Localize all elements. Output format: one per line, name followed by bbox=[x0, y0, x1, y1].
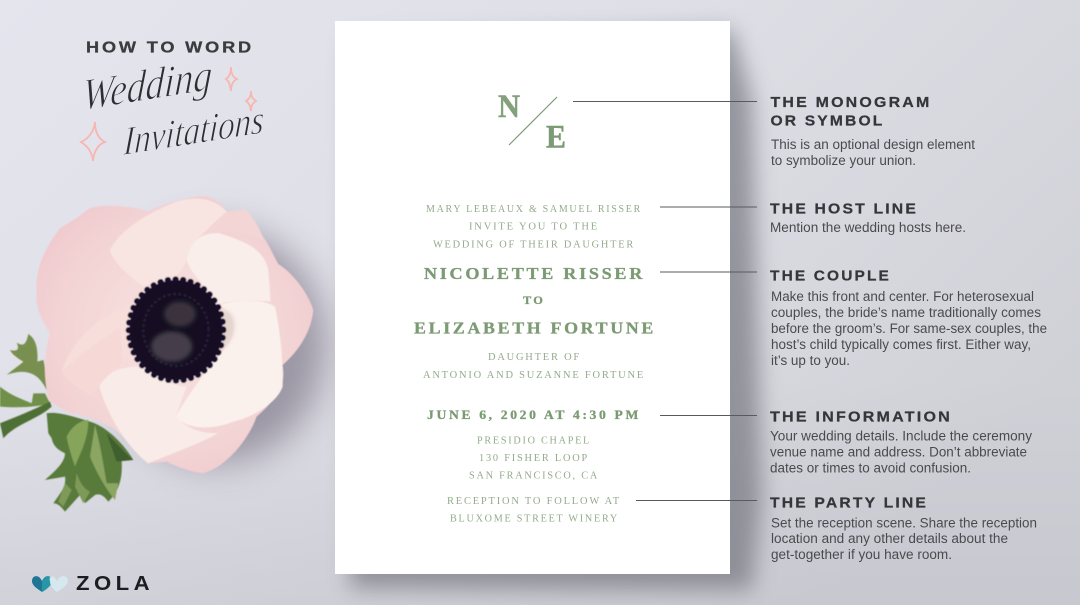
reception: BLUXOME STREET WINERY bbox=[450, 514, 619, 525]
annotation: the couple: host’s child typically comes first. Either way, bbox=[771, 337, 1031, 352]
monogram: E bbox=[546, 120, 566, 156]
annotation: the couple: couples, the bride’s name traditionally comes bbox=[771, 305, 1041, 320]
logo: zola bbox=[32, 573, 154, 595]
annotation: the information bbox=[770, 410, 1032, 476]
panel: invitation card bbox=[335, 21, 730, 574]
reception bbox=[447, 496, 621, 525]
outer petals bbox=[36, 196, 313, 473]
foliage bbox=[0, 334, 133, 512]
host lines: INVITE YOU TO THE bbox=[469, 222, 599, 233]
annotation: the couple: Make this front and center. For heterosexual bbox=[771, 289, 1034, 304]
script word: wedding: Wedding bbox=[81, 49, 214, 120]
annotation: the couple: it’s up to you. bbox=[771, 353, 850, 368]
wordmark: ZOLA bbox=[76, 573, 154, 595]
annotation: the couple: before the groom’s. For same-sex couples, the bbox=[771, 321, 1047, 336]
leader line: party bbox=[636, 500, 757, 502]
leader line: couple bbox=[660, 271, 757, 273]
annotation: the information: venue name and address. Don’t abbreviate bbox=[770, 445, 1027, 460]
annotation: the party line: location and any other details about the bbox=[771, 531, 1008, 546]
leader line: host bbox=[660, 206, 757, 208]
annotation: the couple bbox=[770, 268, 1047, 368]
card shadow bbox=[350, 30, 762, 590]
flower bbox=[36, 196, 313, 473]
venue: 130 FISHER LOOP bbox=[479, 453, 589, 464]
annotation: the party line: Set the reception scene. Share the reception bbox=[771, 515, 1037, 530]
upper petal bbox=[110, 199, 227, 287]
host lines bbox=[426, 204, 642, 250]
parents: ANTONIO AND SUZANNE FORTUNE bbox=[423, 370, 645, 381]
venue: SAN FRANCISCO, CA bbox=[469, 471, 599, 482]
date and time: JUNE 6, 2020 AT 4:30 PM bbox=[427, 407, 641, 422]
venue bbox=[469, 435, 599, 482]
couple names: ELIZABETH FORTUNE bbox=[414, 318, 656, 337]
annotation: the host line: Mention the wedding hosts here. bbox=[770, 220, 966, 235]
icon: hearts bbox=[32, 576, 68, 592]
annotation: the monogram or symbol: to symbolize your union. bbox=[771, 153, 916, 168]
annotation: the party line: get-together if you have room. bbox=[771, 547, 952, 562]
leader line: monogram bbox=[573, 100, 757, 102]
stamen centre bbox=[129, 279, 223, 381]
host lines: MARY LEBEAUX & SAMUEL RISSER bbox=[426, 204, 642, 215]
right lower petal bbox=[176, 301, 283, 427]
title: how to word wedding invitations bbox=[81, 40, 265, 164]
left folded petal bbox=[62, 301, 147, 395]
annotation: the host line: THE HOST LINE bbox=[770, 202, 918, 218]
monogram bbox=[498, 89, 566, 156]
annotation: the information: THE INFORMATION bbox=[770, 410, 952, 426]
venue: PRESIDIO CHAPEL bbox=[477, 435, 591, 446]
bottom petal bbox=[99, 367, 218, 463]
couple names bbox=[414, 264, 656, 337]
annotation: the information: Your wedding details. Include the ceremony bbox=[770, 429, 1032, 444]
annotation: the party line bbox=[770, 495, 1037, 562]
annotation: the monogram or symbol: THE MONOGRAM bbox=[770, 95, 932, 111]
icon: sparkles bbox=[81, 67, 256, 161]
annotation: the party line: THE PARTY LINE bbox=[770, 495, 928, 511]
flower shadow bbox=[103, 227, 327, 463]
monogram: N bbox=[498, 89, 520, 125]
couple names: TO bbox=[523, 295, 545, 307]
annotation: the couple: THE COUPLE bbox=[770, 268, 891, 284]
annotation: the host line bbox=[770, 202, 966, 235]
leader line: information bbox=[660, 414, 757, 416]
annotation: the monogram or symbol: OR SYMBOL bbox=[770, 114, 884, 130]
annotation: the monogram or symbol bbox=[770, 95, 975, 168]
heading: how to word: HOW TO WORD bbox=[86, 40, 254, 56]
parents: DAUGHTER OF bbox=[488, 352, 581, 363]
reception: RECEPTION TO FOLLOW AT bbox=[447, 496, 621, 507]
right upper petal bbox=[187, 233, 271, 305]
couple names: NICOLETTE RISSER bbox=[424, 264, 645, 283]
annotation: the information: dates or times to avoid confusion. bbox=[770, 461, 971, 476]
host lines: WEDDING OF THEIR DAUGHTER bbox=[433, 239, 635, 250]
annotation: the monogram or symbol: This is an optional design element bbox=[771, 137, 975, 152]
parents bbox=[423, 352, 645, 381]
script word: invitations: Invitations bbox=[122, 96, 265, 164]
